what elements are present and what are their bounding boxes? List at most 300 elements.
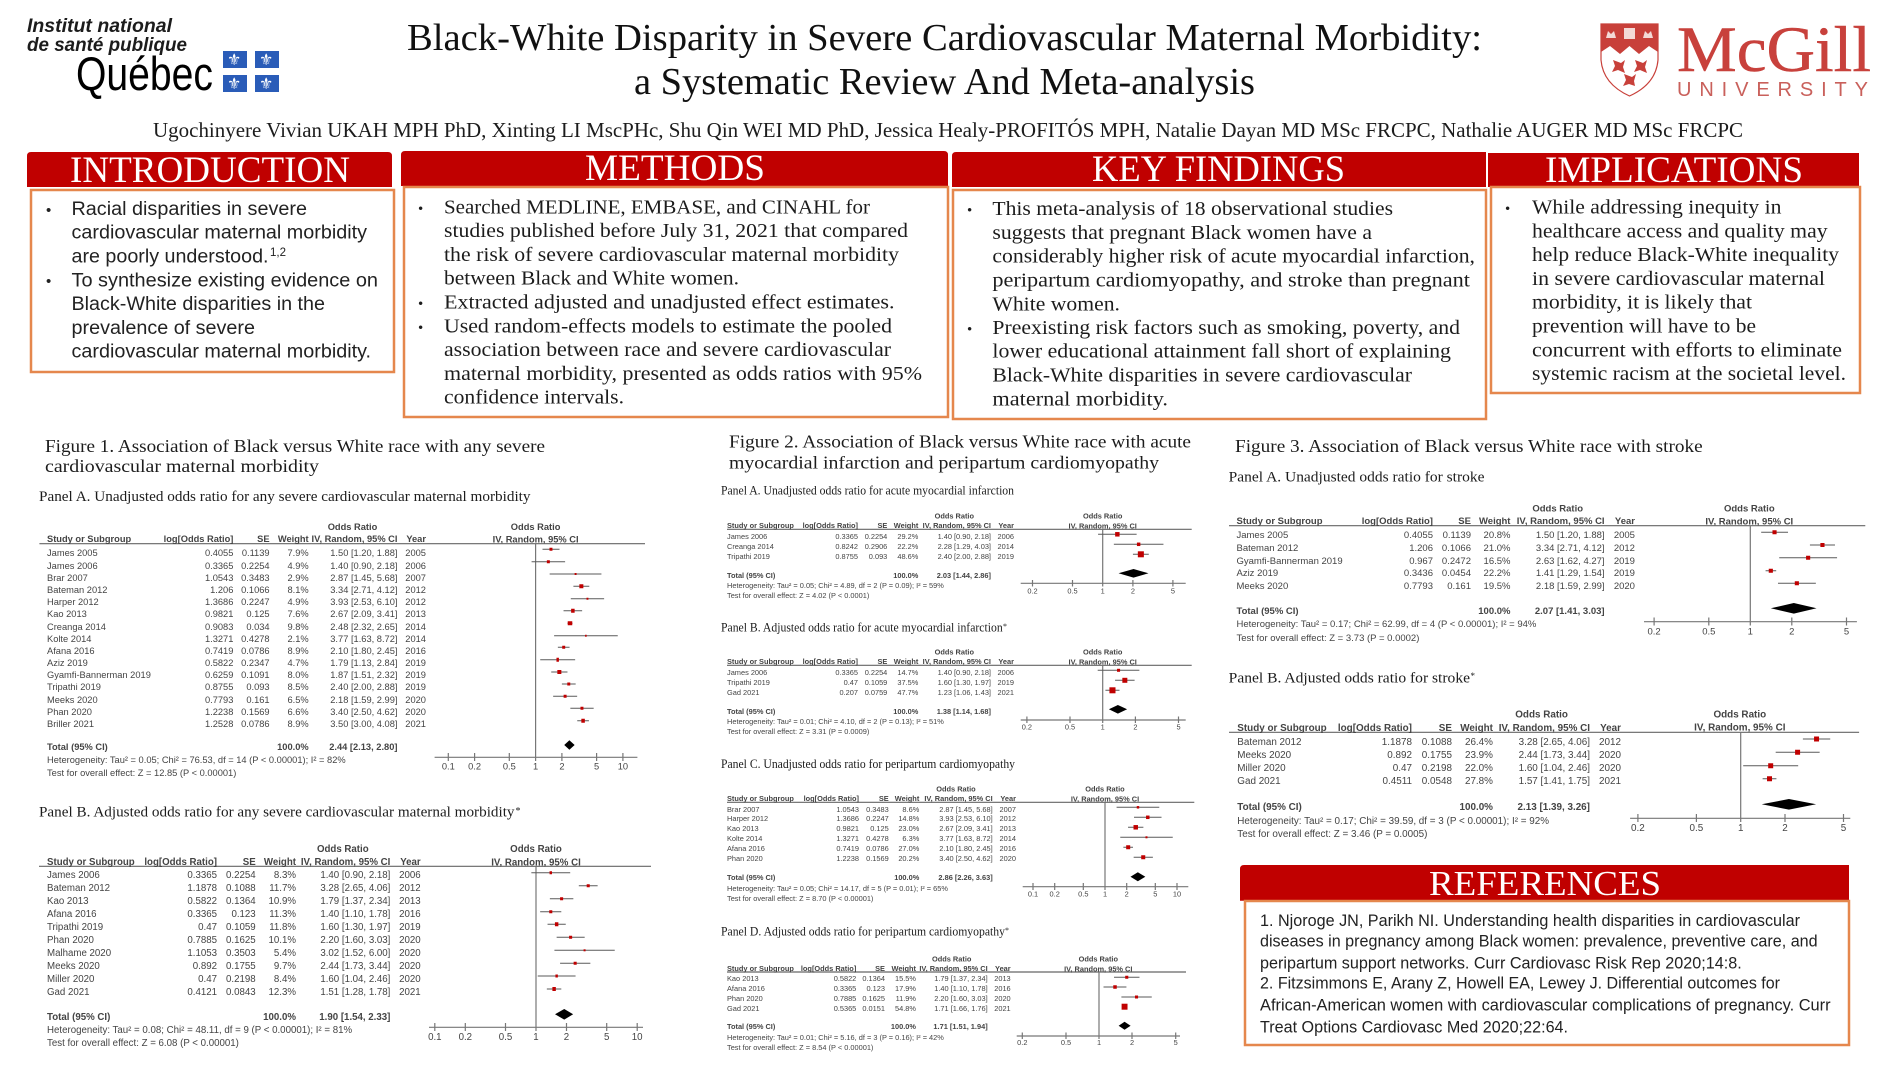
panel: key findings: suggests that pregnant Black women have a [992,222,1372,244]
study table: 0.4055 [205,548,233,558]
study table: 0.4278 [866,834,889,843]
study table: 0.2254 [865,532,887,541]
study table: 3.34 [2.71, 4.12] [1536,543,1605,554]
study table: 2.13 [1.39, 3.26] [1518,802,1590,813]
plot graphic: Odds Ratio [317,844,369,855]
panel: methods: association between race and severe cardiovascular [444,339,891,361]
study table [47,534,426,778]
study table: 0.0454 [1442,568,1471,579]
panel: key findings: • [967,322,972,338]
study table: 100.0% [1459,802,1493,813]
logo: INSPQ Quebec: ⚜ [227,50,241,69]
study table: James 2005 [47,548,98,558]
study table: 2019 [405,658,426,668]
study table: 2005 [405,548,426,558]
authors: Ugochinyere Vivian UKAH MPH PhD, Xinting LI MscPHc, Shu Qin WEI MD PhD, Jessica Healy-PROFITÓS MPH, Natalie Dayan MD MSc FRCPC, Nathalie AUGER MD MSc FRCPC [153,118,1743,142]
study table: 2.18 [1.59, 2.99] [330,695,397,705]
study table: 0.2254 [241,561,270,571]
study table: Harper 2012 [47,597,99,607]
plot graphic [727,785,1194,899]
study table: 0.093 [246,682,270,692]
study table: 1.60 [1.30, 1.97] [320,922,390,933]
study table: Miller 2020 [1237,763,1286,774]
study table: Meeks 2020 [1236,581,1288,592]
logo: McGill University: McGill [1677,14,1871,86]
panel: references: peripartum support networks. Curr Cardiovasc Risk Rep 2020;14:8. [1260,953,1742,972]
panel: references: African-American women with cardiovascular complications of pregnancy. Curr [1260,996,1831,1015]
panel: implications: concurrent with efforts to eliminate [1532,339,1842,361]
figure 3 panel A heading: Panel A. Unadjusted odds ratio for stroke [1229,470,1485,486]
study table: 2.20 [1.60, 3.03] [320,935,390,946]
study table: Harper 2012 [727,814,768,823]
study table: 1.1053 [187,948,217,959]
study table: 0.0548 [1422,776,1452,787]
panel: implications: help reduce Black-White inequality [1532,244,1840,266]
study table: Test for overall effect: Z = 3.31 (P = 0.0009) [727,727,869,736]
panel: methods: METHODS [585,148,765,189]
study table: 17.9% [895,984,916,993]
study table: 1.2238 [205,707,233,717]
study table: 2.63 [1.62, 4.27] [1536,556,1605,567]
study table: 0.47 [198,922,217,933]
study table: 0.123 [231,909,256,920]
study table: 1.79 [1.37, 2.34] [934,974,988,983]
study table: 0.4121 [187,987,217,998]
study table: 21.0% [1484,543,1510,554]
study table: Phan 2020 [47,935,94,946]
study table: 0.2198 [1422,763,1452,774]
plot graphic: 5 [604,1032,609,1043]
study table: 2012 [1614,543,1635,554]
study table: 3.50 [3.00, 4.08] [330,719,397,729]
plot graphic: 5 [1171,586,1175,595]
study table: 27.8% [1465,776,1493,787]
study table: Weight [894,657,918,666]
study table: 0.3365 [187,870,217,881]
plot graphic: 1 [1103,890,1107,899]
study table: 0.7419 [205,646,233,656]
study table [727,657,1014,736]
study table: 0.0786 [241,646,270,656]
study table: 1.40 [0.90, 2.18] [938,668,991,677]
study table [727,964,1011,1052]
study table: 2012 [405,585,426,595]
study table: 1.87 [1.51, 2.32] [330,670,397,680]
study table: SE [877,657,887,666]
study table: 0.5365 [834,1004,856,1013]
study table: Study or Subgroup [47,856,135,868]
study table: 0.1755 [226,961,256,972]
panel: key findings: Black-White disparities in severe cardiovascular [992,365,1412,387]
study table: log[Odds Ratio] [801,964,856,973]
plot graphic: Odds Ratio [1083,648,1123,657]
plot graphic: 2 [564,1032,569,1043]
plot graphic: 1 [1101,586,1105,595]
study table: Year [998,521,1014,530]
study table: 2013 [405,609,426,619]
study table: Brar 2007 [727,804,759,814]
study table: SE [1458,516,1471,527]
study table: 3.40 [2.50, 4.62] [330,707,397,717]
study table: 0.4511 [1382,776,1412,787]
study table: 0.1059 [865,678,887,687]
study table: 1.206 [1409,543,1433,554]
study table: Aziz 2019 [47,658,88,668]
study table: 2014 [405,622,426,632]
study table: 0.034 [246,622,270,632]
study table: Test for overall effect: Z = 6.08 (P < 0.00001) [47,1038,239,1049]
study table: Weight [264,856,296,868]
study table: Aziz 2019 [1236,568,1278,579]
study table: 2013 [399,896,421,907]
plot graphic: 2 [1130,1038,1134,1047]
plot graphic: 0.5 [1078,890,1088,899]
study table: 2.40 [2.00, 2.88] [938,552,991,561]
study table: 2.67 [2.09, 3.41] [939,824,993,833]
study table: Heterogeneity: Tau² = 0.01; Chi² = 4.10, df = 2 (P = 0.13); I² = 51% [727,717,944,726]
forest plot: figure 2 panel B [727,648,1192,736]
study table: 2019 [405,682,426,692]
study table: IV, Random, 95% CI [312,534,397,544]
panel: introduction: cardiovascular maternal morbidity. [72,342,371,363]
study table: 0.892 [193,961,217,972]
study table: Gyamfi-Bannerman 2019 [47,670,151,680]
logo: INSPQ Quebec: Institut national [27,16,173,37]
study table: Study or Subgroup [727,521,794,530]
study table: James 2006 [727,668,767,677]
study table: 100.0% [893,571,918,580]
study table: 20.8% [1484,530,1510,541]
study table: 8.3% [274,870,296,881]
study table: Meeks 2020 [47,695,98,705]
study table: 8.6% [902,804,919,814]
figure 1 heading: Figure 1. Association of Black versus White race with any severe [45,436,545,456]
study table: Heterogeneity: Tau² = 0.05; Chi² = 76.53, df = 14 (P < 0.00001); I² = 82% [47,755,346,765]
study table: 2019 [1614,568,1635,579]
study table: 100.0% [894,873,919,882]
study table: 1.1878 [187,883,217,894]
plot graphic: Odds Ratio [1532,504,1583,515]
study table: 2020 [994,994,1011,1003]
plot graphic: Odds Ratio [936,785,976,794]
study table: SE [877,521,887,530]
study table: 27.0% [898,844,919,853]
study table: Test for overall effect: Z = 12.85 (P < 0.00001) [47,768,236,778]
study table: 1.57 [1.41, 1.75] [1519,776,1590,787]
panel: implications: While addressing inequity in [1532,196,1782,218]
plot graphic: Odds Ratio [1713,710,1766,721]
study table: 1.71 [1.66, 1.76] [934,1004,988,1013]
study table: 2006 [399,870,421,881]
study table: Total (95% CI) [727,1022,775,1031]
panel: methods: maternal morbidity, presented as odds ratios with 95% [444,363,922,385]
study table: Heterogeneity: Tau² = 0.05; Chi² = 4.89, df = 2 (P = 0.09); I² = 59% [727,581,944,590]
study table: James 2005 [1236,530,1288,541]
study table: Tripathi 2019 [47,682,101,692]
study table: 0.1066 [241,585,270,595]
panel: introduction: Racial disparities in severe [72,199,307,220]
study table: Total (95% CI) [727,873,775,882]
plot graphic: 0.5 [1067,586,1078,595]
figure 1 panel B heading: * [516,806,520,817]
panel: references: Treat Options Cardiovasc Med 2020;22:64. [1260,1017,1568,1036]
study table: 8.4% [274,974,296,985]
study table: 0.3483 [241,573,270,583]
study table: 7.6% [287,609,309,619]
study table: Weight [1479,516,1510,527]
plot graphic: Odds Ratio [1083,511,1123,520]
study table: 3.93 [2.53, 6.10] [939,814,993,823]
study table: log[Odds Ratio] [144,856,217,868]
study table: Afana 2016 [727,984,765,993]
study table: SE [243,856,256,868]
study table: 0.0786 [866,844,889,853]
study table: Briller 2021 [47,719,94,729]
figure 2 heading: Figure 2. Association of Black versus White race with acute [729,431,1191,451]
plot graphic: IV, Random, 95% CI [491,857,581,868]
study table: SE [1439,723,1452,734]
panel: implications: IMPLICATIONS [1545,150,1803,191]
study table: 1.71 [1.51, 1.94] [933,1022,988,1031]
panel: key findings: considerably higher risk of acute myocardial infarction, [992,246,1475,268]
plot graphic: 1 [1101,722,1105,731]
study table: Tripathi 2019 [47,922,103,933]
plot graphic: 2 [1131,586,1135,595]
study table: 2019 [998,552,1014,561]
study table: 2020 [1599,763,1621,774]
forest plot: figure 3 panel A [1229,504,1866,644]
study table: 0.7885 [834,994,856,1003]
plot graphic: 10 [618,761,628,771]
study table: 1.60 [1.30, 1.97] [938,678,991,687]
study table: Gad 2021 [47,987,90,998]
study table: 0.7419 [836,844,859,853]
study table: 54.8% [895,1004,916,1013]
panel: key findings: maternal morbidity. [992,388,1168,410]
study table: Weight [278,534,309,544]
plot graphic: 2 [1125,890,1129,899]
panel: key findings: This meta-analysis of 18 observational studies [992,198,1393,220]
study table: Creanga 2014 [727,542,774,551]
study table: 2.20 [1.60, 3.03] [934,994,988,1003]
study table: Year [998,657,1014,666]
plot graphic: 0.5 [1702,626,1715,637]
plot graphic: Odds Ratio [1079,955,1118,964]
logo: INSPQ Quebec: ⚜ [259,50,273,69]
study table: Heterogeneity: Tau² = 0.01; Chi² = 5.16, df = 3 (P = 0.16); I² = 42% [727,1033,944,1042]
study table: 0.2254 [226,870,256,881]
study table: 0.3483 [866,804,889,814]
panel: key findings [952,149,1486,419]
panel: references: diseases in pregnancy among Black women: prevalence, preventive care, and [1260,932,1818,951]
logo: INSPQ Quebec: ⚜ [259,74,273,93]
panel: introduction: • [46,202,51,219]
panel: references: 2. Fitzsimmons E, Arany Z, Howell EA, Lewey J. Differential outcomes for [1260,974,1780,993]
study table: 2020 [399,974,421,985]
study table: 2021 [399,987,421,998]
study table: 2.48 [2.32, 2.65] [330,622,397,632]
figure 3 panel B heading: * [1470,671,1476,681]
study table: 0.4278 [241,634,270,644]
study table: 2.10 [1.80, 2.45] [330,646,397,656]
study table: 2.44 [2.13, 2.80] [329,742,397,752]
study table: 2014 [405,634,426,644]
study table: 20.2% [898,854,919,863]
plot graphic: 0.5 [1065,722,1075,731]
study table: 0.1364 [862,974,885,983]
study table: Study or Subgroup [727,964,794,973]
study table: 1.3686 [205,597,233,607]
study table: 0.9083 [205,622,233,632]
study table: 1.79 [1.37, 2.34] [320,896,390,907]
study table: James 2006 [727,532,767,541]
study table: 1.60 [1.04, 2.46] [1519,763,1590,774]
study table: 2021 [405,719,426,729]
study table: log[Odds Ratio] [803,657,858,666]
study table: 1.206 [210,585,233,595]
study table: 2.87 [1.45, 5.68] [939,804,993,814]
study table: 2.07 [1.41, 3.03] [1535,606,1605,617]
study table: Test for overall effect: Z = 4.02 (P < 0.0001) [727,591,869,600]
study table: 2020 [399,948,421,959]
study table: 1.38 [1.14, 1.68] [937,707,991,716]
study table: Meeks 2020 [1237,750,1291,761]
plot graphic: 5 [1174,1038,1178,1047]
plot graphic [1229,710,1860,834]
figure 2 panel D heading: * [1005,926,1009,935]
study table: Study or Subgroup [1237,723,1327,734]
study table: 3.77 [1.63, 8.72] [330,634,397,644]
study table [47,856,421,1049]
study table: 47.7% [897,688,918,697]
plot graphic: IV, Random, 95% CI [1705,517,1793,528]
study table: 1.50 [1.20, 1.88] [330,548,397,558]
study table: 1.1878 [1382,737,1412,748]
study table: 2.28 [1.29, 4.03] [938,542,991,551]
study table: Kao 2013 [47,896,88,907]
plot graphic: 10 [632,1032,643,1043]
panel: implications [1488,150,1860,393]
study table: 3.34 [2.71, 4.12] [330,585,397,595]
panel: methods: the risk of severe cardiovascular maternal morbidity [444,244,900,266]
plot graphic: 1 [1738,823,1744,834]
study table: Study or Subgroup [1236,516,1323,527]
panel: introduction: To synthesize existing evidence on [72,270,378,291]
study table: 2012 [1000,814,1016,823]
study table: 2013 [994,974,1011,983]
study table: Meeks 2020 [47,961,100,972]
study table: 2014 [998,542,1014,551]
study table: log[Odds Ratio] [164,534,233,544]
study table: 0.9821 [205,609,233,619]
study table: 2020 [405,707,426,717]
study table: 6.3% [902,834,919,843]
study table: 1.60 [1.04, 2.46] [320,974,390,985]
panel: introduction: 1,2 [270,247,286,259]
study table: Phan 2020 [47,707,92,717]
study table: 0.47 [198,974,217,985]
plot graphic [39,844,651,1043]
study table: Year [995,964,1011,973]
study table: Year [400,856,421,868]
study table: 0.1755 [1422,750,1452,761]
study table: 22.2% [1484,568,1510,579]
plot graphic [727,511,1192,595]
study table: log[Odds Ratio] [1338,723,1412,734]
panel: methods: • [418,297,423,313]
panel: key findings: • [967,203,972,219]
plot graphic: 0.1 [442,761,455,771]
figure 3 panel B heading: Panel B. Adjusted odds ratio for stroke [1229,670,1470,686]
study table: 0.1569 [866,854,889,863]
study table [727,521,1014,600]
study table: 0.3365 [187,909,217,920]
study table: 2014 [1000,834,1016,843]
study table: 1.40 [1.10, 1.78] [320,909,390,920]
study table: Heterogeneity: Tau² = 0.08; Chi² = 48.11, df = 9 (P < 0.00001); I² = 81% [47,1025,352,1036]
study table: Bateman 2012 [47,883,110,894]
study table: 3.77 [1.63, 8.72] [939,834,993,843]
study table: 2012 [405,597,426,607]
study table: Kao 2013 [727,974,759,983]
study table: 2020 [1599,750,1621,761]
study table: Brar 2007 [47,573,88,583]
plot graphic: 5 [1153,890,1157,899]
study table: 0.967 [1409,556,1433,567]
panel: key findings: Preexisting risk factors such as smoking, poverty, and [992,317,1460,339]
study table: 16.5% [1484,556,1510,567]
study table: 22.2% [897,542,918,551]
study table: 26.4% [1465,737,1493,748]
study table: 2016 [994,984,1011,993]
study table: 11.7% [269,883,296,894]
study table: 2.86 [2.26, 3.63] [938,873,993,882]
study table: Malhame 2020 [47,948,111,959]
study table: 0.1059 [226,922,256,933]
study table: 8.0% [287,670,309,680]
study table: 0.2906 [865,542,887,551]
study table: Year [1615,516,1635,527]
study table: 1.3686 [836,814,859,823]
study table: 0.2254 [865,668,887,677]
study table: 19.5% [1484,581,1510,592]
panel: implications: systemic racism at the societal level. [1532,363,1846,385]
plot graphic: IV, Random, 95% CI [1069,657,1137,666]
study table: 2019 [399,922,421,933]
study table: 2.44 [1.73, 3.44] [320,961,390,972]
plot graphic: Odds Ratio [328,522,378,532]
study table: Afana 2016 [727,844,765,853]
study table: 2012 [399,883,421,894]
study table: 10.9% [269,896,296,907]
plot graphic: Odds Ratio [510,844,562,855]
plot graphic: 0.1 [1028,890,1038,899]
study table: 2.44 [1.73, 3.44] [1519,750,1590,761]
study table: Creanga 2014 [47,622,106,632]
study table: 1.3271 [836,834,859,843]
figure 2 panel A heading: Panel A. Unadjusted odds ratio for acute myocardial infarction [721,483,1015,497]
figure 3 heading: Figure 3. Association of Black versus White race with stroke [1235,436,1703,456]
study table: 0.1088 [1422,737,1452,748]
plot graphic: 10 [1173,890,1181,899]
study table: log[Odds Ratio] [804,794,859,803]
panel: implications: healthcare access and quality may [1532,220,1828,242]
figure 2 heading: myocardial infarction and peripartum cardiomyopathy [729,453,1159,473]
study table: Heterogeneity: Tau² = 0.05; Chi² = 14.17, df = 5 (P = 0.01); I² = 65% [727,884,948,893]
plot graphic: IV, Random, 95% CI [1694,723,1785,734]
study table: Tripathi 2019 [727,552,770,561]
study table: Total (95% CI) [1237,802,1302,813]
